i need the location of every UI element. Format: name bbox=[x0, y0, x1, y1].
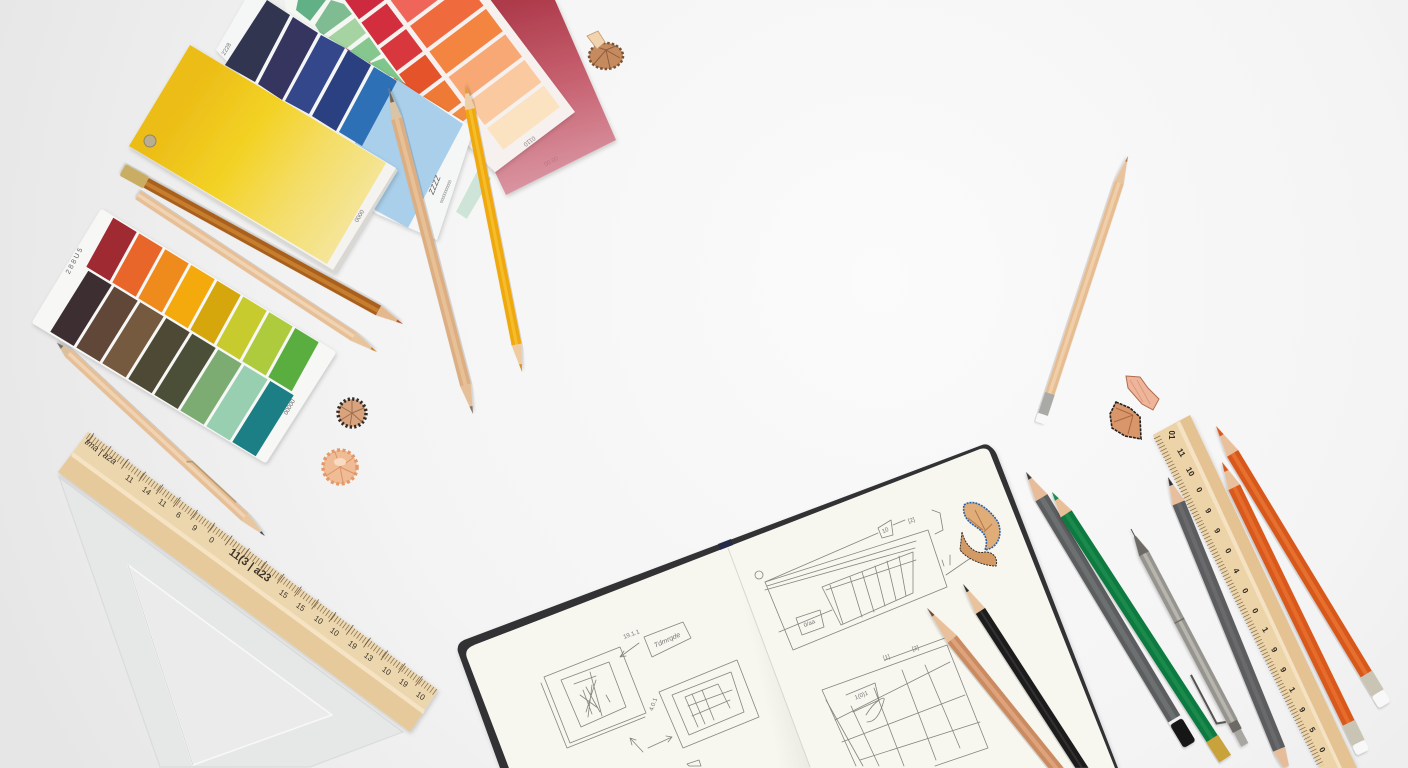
notebook cover bbox=[458, 444, 1118, 768]
ruler numbers: 10 bbox=[312, 614, 325, 627]
sketch: grid elevation bbox=[822, 638, 988, 766]
ruler numbers bbox=[83, 437, 427, 703]
ruler numbers right: 0 bbox=[1317, 746, 1327, 754]
sketch: shelf elevation bbox=[755, 510, 975, 650]
ruler numbers: tma | aza bbox=[83, 437, 119, 466]
orange card middle column bbox=[361, 0, 560, 150]
sketch: labelled box: Tdmrqde bbox=[653, 632, 682, 650]
warm colour row bbox=[86, 218, 319, 391]
sketch: grid elevation: 1(0)1 bbox=[854, 690, 870, 701]
ruler numbers right: 9 bbox=[1278, 666, 1288, 674]
ruler numbers: 11 bbox=[123, 473, 136, 485]
notebook pages bbox=[466, 448, 1115, 768]
ruler numbers: 10 bbox=[328, 626, 341, 639]
ruler numbers: 15 bbox=[294, 601, 307, 614]
triangle cut-out bbox=[128, 565, 332, 765]
ruler numbers right bbox=[1167, 431, 1327, 754]
ruler numbers right: 9 bbox=[1297, 706, 1307, 714]
light blue panel bbox=[350, 80, 463, 228]
ruler numbers: 11 bbox=[156, 497, 169, 509]
ruler numbers right: 10 bbox=[1184, 466, 1197, 478]
ruler numbers: 9 bbox=[190, 523, 199, 533]
yellow card label: 0000 bbox=[354, 209, 366, 224]
ruler numbers: 14 bbox=[140, 485, 153, 498]
mechanical pencil bbox=[1118, 526, 1250, 752]
pink card label: 00 00 bbox=[543, 156, 560, 168]
sketch: grid frame bbox=[659, 660, 759, 748]
ruler numbers right: 1 bbox=[1287, 686, 1297, 694]
ruler numbers right: 9 bbox=[1212, 527, 1222, 535]
ruler numbers: 11(3 | a23 bbox=[226, 546, 273, 585]
pencil: yellow bbox=[460, 84, 527, 373]
ruler numbers right: 01 bbox=[1167, 431, 1176, 440]
sketch: grid elevation: [2] bbox=[911, 645, 920, 653]
pencil: natural wood bbox=[135, 191, 380, 356]
pale mint card corner bbox=[455, 168, 492, 220]
shaving: dark edged bbox=[1110, 402, 1141, 439]
ruler numbers: 6 bbox=[174, 510, 183, 520]
yellow swatch card bbox=[129, 45, 398, 274]
left page sketches bbox=[541, 622, 759, 766]
blue card labels: 2228 bbox=[221, 42, 233, 57]
rainbow swatch card bbox=[35, 212, 333, 460]
navy stripes bbox=[225, 0, 397, 146]
wooden ruler left bbox=[58, 432, 438, 732]
spine ribbon bbox=[718, 539, 733, 550]
shaving: peach bbox=[323, 450, 357, 484]
gutter line bbox=[728, 548, 810, 767]
ruler ticks right bbox=[1157, 437, 1321, 766]
pencil: natural long sharpened both ends bbox=[383, 86, 478, 415]
pencil: black on notebook bbox=[958, 581, 1089, 768]
ruler numbers right: 11 bbox=[1175, 447, 1187, 459]
sketch: arrows: 4.0.1 bbox=[649, 697, 659, 712]
ruler numbers: 13 bbox=[362, 651, 375, 664]
sketch: arrows: 19.1.1 bbox=[623, 629, 641, 641]
pencil: gray sharpened both ends bbox=[1162, 475, 1292, 768]
notebook bbox=[458, 444, 1118, 768]
ruler numbers: 10 bbox=[414, 690, 427, 703]
ruler numbers right: 0 bbox=[1240, 587, 1250, 595]
pencil: orange inner bbox=[1216, 459, 1369, 756]
left page shading bbox=[468, 548, 811, 768]
sketch: shelf elevation: [2] bbox=[907, 517, 916, 525]
rivet bbox=[144, 135, 156, 147]
pen clip bbox=[1191, 671, 1226, 726]
sketch: shelf elevation: 10 bbox=[881, 527, 890, 535]
triangle ruler bbox=[59, 477, 403, 767]
orange swatch card bbox=[285, 0, 575, 203]
right page sketches bbox=[755, 510, 988, 766]
navy and blue swatch card: 00000000000 bbox=[439, 178, 453, 204]
orange card label: 0110 bbox=[521, 134, 536, 147]
green swatch card bbox=[285, 0, 406, 84]
shaving: pink bbox=[1126, 376, 1159, 410]
ruler numbers right: 9 bbox=[1203, 507, 1213, 515]
wooden ruler right bbox=[1153, 415, 1357, 768]
navy and blue swatch card: ZZZZ bbox=[426, 173, 443, 197]
ruler numbers right: 4 bbox=[1231, 567, 1241, 575]
pencil: gray with black cap bbox=[1020, 468, 1196, 748]
rainbow card labels: 2 8 8 U 5 bbox=[65, 247, 84, 275]
ruler numbers right: 1 bbox=[1260, 626, 1270, 634]
green swatches bbox=[296, 0, 404, 83]
ruler ticks bbox=[88, 436, 436, 693]
sketch: grid elevation: [1] bbox=[882, 654, 891, 662]
shaving: dark round bbox=[338, 399, 366, 427]
ruler numbers right: 0 bbox=[1223, 547, 1233, 555]
ruler numbers: 15 bbox=[277, 588, 290, 601]
shaving: blue edged pair bbox=[960, 503, 1000, 566]
pencil: natural with eraser bbox=[1035, 154, 1133, 425]
ruler numbers right: 0 bbox=[1250, 607, 1260, 615]
ruler numbers: 19 bbox=[346, 639, 359, 652]
pencil: brown on notebook bbox=[922, 604, 1064, 768]
orange card red column bbox=[304, 0, 471, 155]
dark and teal row bbox=[50, 271, 294, 456]
rainbow swatch card: 00000 bbox=[283, 398, 297, 416]
pencil: brown with gold ferrule bbox=[119, 164, 406, 330]
pencil: orange outer bbox=[1210, 422, 1391, 708]
ruler numbers right: 9 bbox=[1269, 646, 1279, 654]
sketch: arrows bbox=[620, 629, 701, 766]
navy and blue swatch card bbox=[216, 0, 474, 240]
pencil: natural with clip bbox=[54, 339, 268, 540]
sketch: hatched frame bbox=[541, 647, 646, 748]
shaving: top brown bbox=[587, 31, 623, 69]
pencil: green with gold ferrule bbox=[1046, 488, 1231, 763]
ruler numbers right: 5 bbox=[1307, 726, 1317, 734]
ruler numbers: 0 bbox=[207, 535, 216, 545]
sketch: labelled box bbox=[644, 622, 691, 657]
ruler numbers: 10 bbox=[380, 665, 393, 678]
pencil clip bbox=[187, 459, 236, 505]
ruler numbers right: 0 bbox=[1194, 486, 1204, 494]
pink swatch card bbox=[490, 0, 616, 195]
ruler numbers: 19 bbox=[397, 677, 410, 690]
sketch: shelf elevation: 0/aa bbox=[803, 619, 817, 629]
